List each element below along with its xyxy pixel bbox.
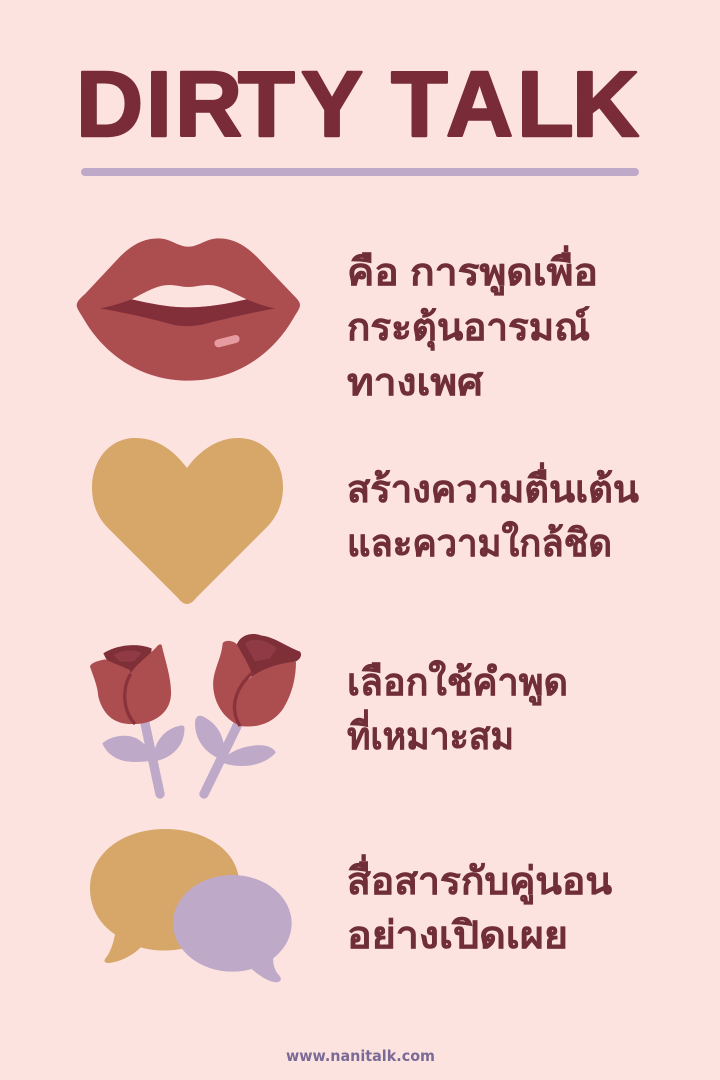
panel: excitement [92,438,639,604]
panel: word choice [90,634,568,794]
text: definition [347,245,598,404]
text: excitement: และความใกล้ชิด [347,521,612,565]
title underline [81,168,639,176]
icon: lips [77,238,300,381]
title: DIRTY TALK [76,52,639,156]
panel: definition [77,238,598,404]
text: definition: ทางเพศ [347,362,484,404]
text: excitement [347,462,639,565]
text: word choice [347,660,568,758]
text: communication [347,854,612,957]
panel: communication [90,829,612,982]
text: excitement: สร้างความตื่นเต้น [347,462,639,511]
icon: heart [92,438,283,604]
footer url: www.nanitalk.com [286,1047,435,1065]
text: communication: อย่างเปิดเผย [347,915,568,957]
text: word choice: ที่เหมาะสม [347,709,514,758]
icon: speech bubbles [90,829,292,982]
icon: roses [90,634,301,794]
text: definition: คือ การพูดเพื่อ [347,245,598,296]
text: communication: สื่อสารกับคู่นอน [347,854,612,905]
text: word choice: เลือกใช้คำพูด [347,660,568,706]
text: definition: กระตุ้นอารมณ์ [347,306,590,351]
